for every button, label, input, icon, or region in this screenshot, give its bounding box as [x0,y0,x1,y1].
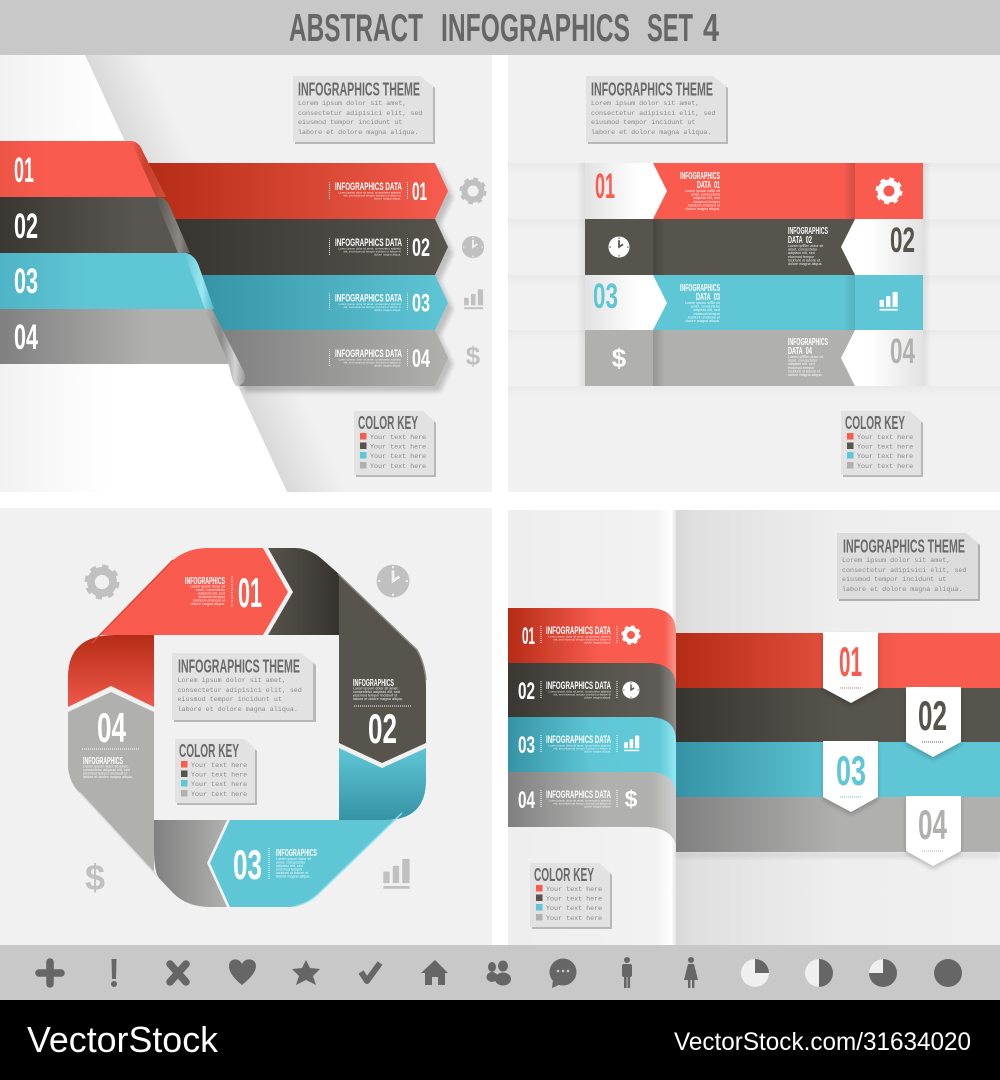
row 02 text: Lorem ipsum dolor sit [788,244,823,248]
color key: Your text here [857,453,913,461]
arrow 04 label: 04 [412,345,430,373]
note: infographics theme: Lorem ipsum dolor sit amet, [591,100,699,108]
icon: cross [170,964,186,982]
row 03 text: INFOGRAPHICS [680,283,720,294]
icon: house [421,960,448,985]
arrow 03 label: dolore magna aliqua. [374,308,401,312]
footer watermark bar [0,1000,1000,1080]
icon: chart [880,292,898,311]
row 04 text: eiusmod tempor [788,366,815,370]
right band 03 [676,742,1000,797]
note: infographics theme: INFOGRAPHICS THEME [178,656,300,676]
note: infographics theme: eiusmod tempor incidunt ut [842,576,946,584]
row 02 text: INFOGRAPHICS [788,226,828,237]
left tab 04: dolore magna aliqua. [584,804,611,808]
segment 03 number and text: 03 [233,841,262,888]
arrow 01 label: dolore magna aliqua. [374,196,401,200]
arrow 02 label [330,234,430,262]
color key: COLOR KEY [845,413,905,433]
note: infographics theme [293,76,435,144]
segment 03 number and text: adipisici elit, sed [276,864,303,868]
segment 04 number and text: INFOGRAPHICS [83,756,123,767]
color key: Your text here [546,886,602,894]
note: infographics theme: Lorem ipsum dolor sit amet, [298,100,406,108]
tag 04 [906,796,961,869]
left tab 03: Lorem ipsum dolor sit amet, consectetur adipisici [548,744,611,748]
left tab 03: dolore magna aliqua. [584,750,611,754]
color key: Your text here [370,434,426,442]
arrow 02 label: Lorem ipsum dolor sit amet, consectetur adipisici [338,246,401,250]
icon: speech bubble [550,958,576,988]
header bar with title: 4 [703,7,719,50]
segment 03 teal [210,813,402,907]
right band 01 [676,633,1000,688]
note: infographics theme: INFOGRAPHICS THEME [591,80,713,100]
icon: dollar: $ [625,786,638,812]
arrow 03 label: INFOGRAPHICS DATA [335,292,402,304]
note: infographics theme: consectetur adipisici elit, sed [842,567,966,575]
row 04 text: Lorem ipsum dolor sit [788,355,823,359]
right band 02 [676,688,1000,742]
color key: Your text here [857,463,913,471]
arrow 02 label: elit, sed eiusmod tempor incidunt ut labore et [343,250,401,254]
segment 04 number and text: 04 [97,704,126,751]
row 01 text: Lorem ipsum dolor sit [685,189,720,193]
right band 04 [676,797,1000,852]
icon: plus [39,962,61,984]
footer watermark bar: VectorStock [27,1019,219,1060]
row 03 text: incidunt ut labore et [688,315,720,319]
note: infographics theme: Lorem ipsum dolor sit amet, [178,677,286,685]
segment 01 number and text: adipisici elit, sed [198,592,225,596]
color key: COLOR KEY [179,741,239,761]
left band 01 [0,141,166,197]
color key: COLOR KEY [358,413,418,433]
header bar with title: INFOGRAPHICS [441,7,630,50]
color key: Your text here [191,781,247,789]
row 04 [585,330,923,386]
band: charcoal fold [268,548,340,635]
row 04: 04 [890,332,915,371]
row 03 [585,275,923,330]
left tab 03: INFOGRAPHICS DATA [546,734,611,746]
left band 04 with curl: 04 [14,318,38,357]
row 02 text [788,226,828,266]
segment 04 number and text [82,704,139,779]
arrow 04 label: INFOGRAPHICS DATA [335,348,402,360]
color key: Your text here [370,463,426,471]
row 03 text: dolore magna aliqua. [686,319,720,323]
icon: chart [624,736,639,751]
tag 01: 01 [839,638,862,685]
left tab 04 [508,772,676,845]
color key [354,411,436,477]
arrow 04 label: dolore magna aliqua. [374,364,401,368]
icon: clock [622,681,640,699]
left band 02: 02 [14,207,38,246]
segment 01 number and text: 01 [238,569,262,616]
left tab 03: 03 [518,732,535,759]
segment 03 number and text: incidunt ut labore et [276,871,308,875]
left tab 04: elit, sed eiusmod tempor incidunt ut labore et [553,802,611,806]
row 04 text: adipisici elit, sed [788,362,815,366]
left tab 02: Lorem ipsum dolor sit amet, consectetur adipisici [548,690,611,694]
left tab 04: Lorem ipsum dolor sit amet, consectetur adipisici [548,798,611,802]
row 03 text: DATA_03 [696,292,720,303]
band: teal fold [339,748,426,820]
icon bar [0,945,1000,1000]
row 02 text: eiusmod tempor [788,255,815,259]
segment 02 number and text: eiusmod tempor incidunt ut [353,694,397,698]
color key: Your text here [546,905,602,913]
left band 03: 03 [14,262,38,301]
icon: exclamation [111,959,117,987]
arrow 01 label: 01 [412,178,427,206]
row 03 text: adipisici elit, sed [693,308,720,312]
segment 03 number and text: INFOGRAPHICS [276,848,317,859]
tag 03 [823,741,878,815]
segment 04 number and text: labore et dolore magna aliqua. [83,775,133,779]
row 02 text: DATA_02 [788,235,812,246]
icon: check [361,963,380,981]
row 01 text: dolore magna aliqua. [686,207,720,211]
icon: heart [229,959,256,985]
row 01 text: amet, consectetur [691,193,721,197]
arrow 03 label: 03 [412,290,430,318]
icon: full circle [934,959,962,987]
segment 01 number and text [185,569,262,616]
segment 04 gray [68,692,158,877]
row 04 text [788,337,828,377]
segment 02 number and text: 02 [368,705,397,752]
arrow 03 label [330,290,430,318]
color key: Your text here [191,772,247,780]
band: gray fold [154,820,227,907]
row 02: 02 [890,221,915,260]
segment 03 number and text: eiusmod tempor [276,868,303,872]
color key: Your text here [546,896,602,904]
icon: gear [623,627,639,643]
left tab 03: elit, sed eiusmod tempor incidunt ut labore et [553,746,611,750]
segment 01 number and text: eiusmod tempor [199,595,226,599]
left band 01: 01 [14,151,34,190]
color key: Your text here [370,444,426,452]
segment 03 number and text: dolore magna aliqua. [276,874,310,878]
segment 03 number and text [233,841,317,888]
icon: clock [462,236,484,258]
row 01 [585,163,923,219]
arrow ribbon 04 [220,330,448,386]
segment 03 number and text: Lorem ipsum dolor sit [276,857,311,861]
segment 04 number and text: eiusmod tempor incidunt ut [83,772,127,776]
left tab 01: 01 [522,623,535,650]
segment 02 charcoal [337,573,426,763]
arrow ribbon 01 [148,163,448,219]
note: infographics theme: labore et dolore magna aliqua. [842,586,962,594]
row 03 text [680,283,721,323]
color key: Your text here [191,762,247,770]
tag 03: 03 [836,747,866,794]
icon: pie three-quarter [869,959,897,987]
left tab 01: INFOGRAPHICS DATA [546,625,611,637]
color key: Your text here [370,453,426,461]
note: infographics theme: labore et dolore magna aliqua. [591,129,711,137]
color key [530,863,612,929]
footer watermark bar: VectorStock.com/31634020 [674,1028,971,1056]
segment 03 number and text: amet, consectetur [276,860,306,864]
note: infographics theme: consectetur adipisici elit, sed [298,110,422,118]
left tab 03 [508,717,676,800]
segment 01 number and text: amet, consectetur [196,588,226,592]
left band 02 [0,197,190,253]
left tab 02: 02 [518,678,535,705]
left tab 01: Lorem ipsum dolor sit amet, consectetur adipisici [548,634,611,638]
color key: Your text here [857,434,913,442]
arrow 01 label: Lorem ipsum dolor sit amet, consectetur adipisici [338,190,401,194]
note: infographics theme: labore et dolore magna aliqua. [298,129,418,137]
icon: clock [608,236,630,258]
note: infographics theme [837,533,980,601]
icon: chart [383,859,410,889]
left band 04 with curl [0,309,245,386]
left tab 04: 04 [518,787,535,814]
color key [175,739,257,805]
tag 02 [906,687,961,760]
row 01 text: eiusmod tempor [694,200,721,204]
color key: Your text here [191,791,247,799]
segment 02 number and text [353,678,412,752]
arrow 04 label: elit, sed eiusmod tempor incidunt ut labore et [343,360,401,364]
arrow ribbon 03 [195,275,448,330]
left tab 02: elit, sed eiusmod tempor incidunt ut labore et [553,692,611,696]
tag 01 [823,632,878,706]
icon: gear [462,180,484,202]
icon: woman [684,957,698,988]
note: infographics theme: labore et dolore magna aliqua. [178,706,298,714]
arrow ribbon 02 [170,219,448,275]
row 04 text: INFOGRAPHICS [788,337,828,348]
segment 01 number and text: INFOGRAPHICS [185,576,225,587]
row 04 text: dolore magna aliqua. [788,373,822,377]
panel: octagon loop [0,508,492,945]
note: infographics theme [172,653,316,722]
row 02 [585,219,923,275]
panel: diagonal fold ribbons [0,55,492,492]
arrow 02 label: INFOGRAPHICS DATA [335,237,402,249]
icon: pie quarter [741,959,769,987]
note: infographics theme: eiusmod tempor incidunt ut [298,119,402,127]
panel: woven rows [508,55,1000,492]
note: infographics theme: Lorem ipsum dolor sit amet, [842,557,950,565]
left tab 02: dolore magna aliqua. [584,696,611,700]
row 01 text [680,171,721,211]
tag 04: 04 [918,801,947,848]
arrow 04 label [330,345,430,373]
row 02 text: incidunt ut labore et [788,258,820,262]
segment 01 red [92,548,288,643]
segment 01 number and text: Lorem ipsum dolor sit [190,584,225,588]
tag 02: 02 [918,692,947,739]
icon: dollar: $ [466,341,481,371]
note: infographics theme: consectetur adipisici elit, sed [591,110,715,118]
segment 02 number and text: labore et dolore magna aliqua. [353,697,403,701]
row 01 text: adipisici elit, sed [693,196,720,200]
arrow 01 label: elit, sed eiusmod tempor incidunt ut labore et [343,194,401,198]
left tab 01: dolore magna aliqua. [584,640,611,644]
icon: star [292,960,320,985]
note: infographics theme: INFOGRAPHICS THEME [298,80,420,100]
left tab 01: elit, sed eiusmod tempor incidunt ut labore et [553,638,611,642]
color key: Your text here [546,915,602,923]
row 02 text: adipisici elit, sed [788,251,815,255]
row 01 text: INFOGRAPHICS [680,171,720,182]
panel: page-fold bands with tags [508,510,1000,945]
arrow 02 label: dolore magna aliqua. [374,252,401,256]
icon: gear [87,567,117,597]
arrow 03 label: Lorem ipsum dolor sit amet, consectetur adipisici [338,302,401,306]
segment 01 number and text: incidunt ut labore et [193,598,225,602]
note: infographics theme [586,76,728,144]
segment 01 number and text: dolore magna aliqua. [191,602,225,606]
icon: people [486,960,511,986]
row 03: 03 [593,277,618,316]
icon: man [622,957,632,988]
row 03 text: Lorem ipsum dolor sit [685,301,720,305]
row 02 text: amet, consectetur [788,248,818,252]
row 01: 01 [595,167,615,206]
row 04 text: amet, consectetur [788,359,818,363]
arrow 01 label: INFOGRAPHICS DATA [335,181,402,193]
row 03 text: amet, consectetur [691,305,721,309]
color key [841,411,923,477]
row 03 text: eiusmod tempor [694,312,721,316]
icon: dollar: $ [85,857,105,898]
color key: Your text here [857,444,913,452]
arrow 03 label: elit, sed eiusmod tempor incidunt ut labore et [343,305,401,309]
segment 02 number and text: Lorem ipsum dolor sit amet, [353,686,398,690]
left tab 02: INFOGRAPHICS DATA [546,680,611,692]
row 01 text: DATA_01 [697,180,720,191]
segment 04 number and text: consectetur adipisici elit, sed [83,768,130,772]
icon: gear [878,180,900,202]
note: infographics theme: eiusmod tempor incidunt ut [178,696,282,704]
segment 02 number and text: consectetur adipisici elit, sed [353,690,400,694]
left tab 01 [508,608,676,690]
arrow 02 label: 02 [412,234,430,262]
note: infographics theme: eiusmod tempor incidunt ut [591,119,695,127]
row 04 text: incidunt ut labore et [788,369,820,373]
arrow 01 label [330,178,427,206]
left band 03 [0,253,214,309]
row 04 text: DATA_04 [788,346,812,357]
icon: clock [377,565,409,597]
arrow 04 label: Lorem ipsum dolor sit amet, consectetur adipisici [338,358,401,362]
color key: COLOR KEY [534,865,594,885]
icon: dollar: $ [612,343,627,373]
header bar with title: ABSTRACT [289,7,423,50]
note: infographics theme: consectetur adipisici elit, sed [178,687,302,695]
left tab 02 [508,663,676,745]
row 01 text: incidunt ut labore et [688,203,720,207]
header bar with title: SET [647,7,693,50]
icon: chart [464,289,483,309]
left tab 04: INFOGRAPHICS DATA [546,789,611,801]
arrow shadows [153,169,453,392]
segment 04 number and text: Lorem ipsum dolor sit amet, [83,764,128,768]
segment 02 number and text: INFOGRAPHICS [353,678,394,689]
row 02 text: dolore magna aliqua. [788,262,822,266]
header bar with title [0,0,1000,55]
icon: pie half [805,959,833,987]
band: red fold [68,635,154,707]
